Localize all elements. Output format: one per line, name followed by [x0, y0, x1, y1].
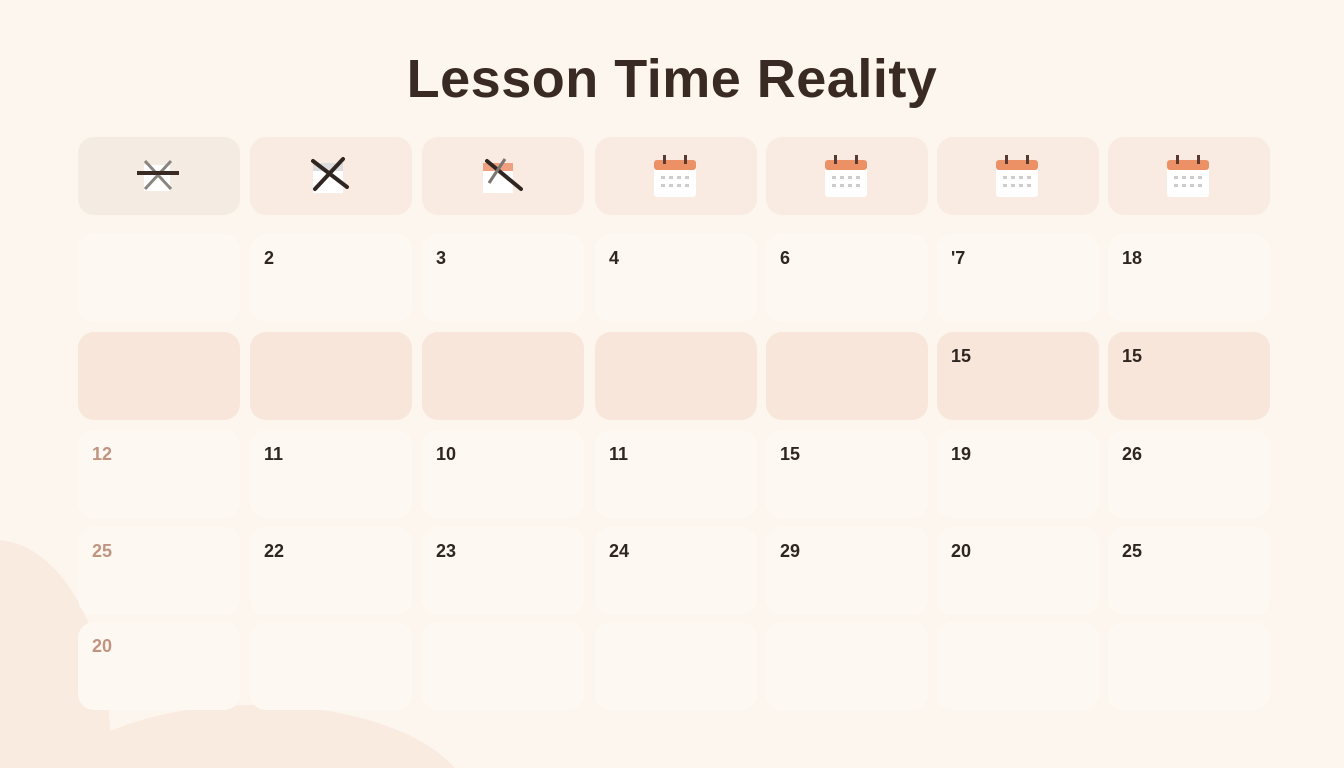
- title: Lesson Time Reality: [407, 49, 937, 109]
- calendar grid: 12: [92, 444, 112, 464]
- calendar grid: 10: [436, 444, 456, 464]
- header cell 1: crossed icon: [78, 137, 240, 215]
- header cell 3: crossed calendar: [422, 137, 584, 215]
- calendar grid: 23: [436, 541, 456, 561]
- calendar grid: 19: [951, 444, 971, 464]
- header cell 2: crossed calendar: [250, 137, 412, 215]
- header row: [78, 137, 1270, 215]
- calendar grid: 22: [264, 541, 284, 561]
- calendar grid: 15: [1122, 346, 1142, 366]
- calendar grid: 29: [780, 541, 800, 561]
- calendar grid: 25: [92, 541, 112, 561]
- calendar grid: 3: [436, 248, 446, 268]
- calendar grid: 25: [1122, 541, 1142, 561]
- calendar grid: 26: [1122, 444, 1142, 464]
- calendar grid: 15: [780, 444, 800, 464]
- calendar grid: '7: [951, 248, 965, 268]
- header cells 4-7: calendar icons: [595, 137, 757, 215]
- calendar grid: 6: [780, 248, 790, 268]
- calendar grid: 18: [1122, 248, 1142, 268]
- calendar grid: 15: [951, 346, 971, 366]
- calendar grid: 4: [609, 248, 619, 268]
- calendar grid: 2: [264, 248, 274, 268]
- calendar grid: 24: [609, 541, 629, 561]
- calendar grid: 20: [951, 541, 971, 561]
- calendar grid: 11: [264, 444, 283, 464]
- calendar grid: 11: [609, 444, 628, 464]
- calendar grid: [78, 248, 1270, 710]
- calendar grid: 20: [92, 636, 112, 656]
